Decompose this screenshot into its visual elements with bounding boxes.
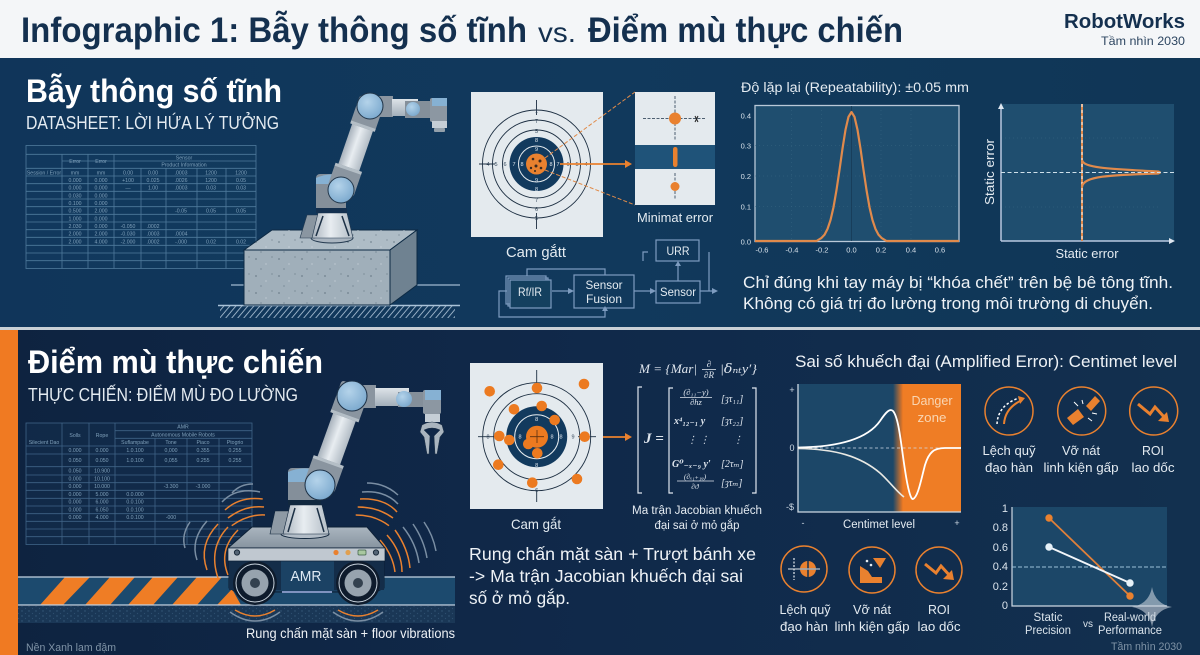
AMR datasheet table: Ptogrio xyxy=(227,440,243,446)
target: repeatability shots: 5 xyxy=(575,162,579,168)
icon: sparkle watermark xyxy=(1132,587,1172,627)
flow labels: Sensor xyxy=(586,278,622,292)
target: scattered shots: 8 xyxy=(518,435,522,441)
y axis ticks: 0.2 xyxy=(993,581,1008,593)
label: trajectory deviation xyxy=(982,443,1036,475)
AMR datasheet table: 6.050 xyxy=(96,508,109,514)
AMR datasheet table: 0.000 xyxy=(69,484,82,490)
AMR datasheet table: 4.000 xyxy=(96,515,109,521)
target: repeatability shots: 8 xyxy=(535,187,538,193)
brand name: RobotWorks xyxy=(1064,11,1185,33)
x axis ticks: -0.2 xyxy=(816,246,828,254)
chart: repeatability gaussian xyxy=(741,106,959,254)
datasheet table xyxy=(26,146,256,268)
icon: ROI falling xyxy=(916,547,962,593)
robot arm on pedestal xyxy=(300,93,447,243)
y axis ticks: 0 xyxy=(1002,600,1008,612)
target: repeatability shots: 8 xyxy=(549,162,553,168)
datasheet table: 4.000 xyxy=(95,240,108,246)
AMR datasheet table: 0.000 xyxy=(69,515,82,521)
AMR datasheet table: 0,000 xyxy=(165,448,178,454)
AMR datasheet table: Silecient Dao xyxy=(29,440,59,446)
danger zone label xyxy=(912,393,953,425)
x axis labels: Real-world xyxy=(1104,612,1156,624)
datasheet table: -.000 xyxy=(175,240,187,246)
danger zone label: zone xyxy=(918,410,946,425)
AMR datasheet table: Tone xyxy=(165,440,177,446)
matrix J xyxy=(638,387,756,493)
datasheet table: 0.02 xyxy=(206,240,216,246)
panel: static spec trap xyxy=(0,58,1200,327)
heading: static trap: Bẫy thông số tĩnh xyxy=(26,73,282,109)
caption: static condition xyxy=(743,273,1173,313)
panel: real-world blind spot xyxy=(0,330,1200,655)
AMR datasheet table: 0.000 xyxy=(69,476,82,482)
target: repeatability shots: 5 xyxy=(535,129,538,135)
flow labels: Rf/IR xyxy=(518,285,542,299)
datasheet table: 0.000 xyxy=(69,186,82,192)
datasheet table: 2.000 xyxy=(69,240,82,246)
target: scattered shots: 8 xyxy=(535,463,538,469)
datasheet table: .0002 xyxy=(147,240,160,246)
datasheet table: 1.000 xyxy=(69,216,82,222)
datasheet table: 0.025 xyxy=(147,178,160,184)
flow labels: Sensor xyxy=(660,285,696,299)
target: repeatability shots: 6 xyxy=(535,207,538,213)
caption: Jacobian: đại sai ở mỏ gắp xyxy=(654,519,740,532)
AMR datasheet table: 0.255 xyxy=(229,448,242,454)
hazard floor band xyxy=(18,577,455,623)
Jacobian equations xyxy=(638,359,758,493)
matrix J: (∂₁₁−y) xyxy=(683,387,709,397)
x axis title: Centimet level xyxy=(843,519,915,531)
x axis ticks: -0.4 xyxy=(786,246,798,254)
matrix J: [2τₘ] xyxy=(721,459,744,470)
AMR datasheet table: Rope xyxy=(96,433,108,439)
subheading: datasheet: DATASHEET: LỜI HỨA LÝ TƯỞNG xyxy=(26,112,279,133)
flow labels: Fusion xyxy=(586,292,622,306)
y axis ticks xyxy=(993,503,1008,612)
AMR datasheet table: 0.0.100 xyxy=(126,515,144,521)
axis labels: - xyxy=(802,518,804,528)
AMR datasheet table: AMR xyxy=(177,424,189,430)
equation M: |ẟₙₜy′} xyxy=(720,361,758,376)
matrix J: ⋮ ⋮ xyxy=(687,435,710,446)
flow labels xyxy=(518,244,696,306)
robot arm on AMR xyxy=(270,380,444,538)
datasheet table: -0.050 xyxy=(121,224,135,230)
label: crushed part xyxy=(834,602,910,634)
y axis ticks: 0.0 xyxy=(741,238,751,246)
target: scattered shots: 8 xyxy=(486,435,490,441)
caption: Jacobian: Ma trận Jacobian khuếch xyxy=(632,505,762,517)
label: target offset: đạo hàn xyxy=(780,619,828,634)
caption: static condition: Không có giá trị đo lường trong môi trường di chuyển. xyxy=(743,294,1153,313)
y axis ticks: 0.8 xyxy=(993,522,1008,534)
AMR datasheet table: 0.050 xyxy=(69,468,82,474)
y axis ticks: 0.2 xyxy=(741,172,751,181)
AMR datasheet table: 0.000 xyxy=(69,492,82,498)
AMR datasheet table: 1.0.100 xyxy=(126,448,144,454)
flow labels: URR xyxy=(666,244,690,258)
equation M: ∂R xyxy=(704,370,714,380)
AMR datasheet table: Autonomous Mobile Robots xyxy=(151,432,215,438)
target: repeatability shots: 6 xyxy=(566,162,570,168)
datasheet table: 0.000 xyxy=(95,224,108,230)
AMR datasheet table: -3.300 xyxy=(164,484,178,490)
x axis ticks: 0.4 xyxy=(906,246,916,254)
label: crushed part: Vỡ nát xyxy=(853,602,891,617)
icon: ROI decline xyxy=(1130,387,1178,435)
label: component breakage xyxy=(1044,443,1118,475)
label: trajectory deviation: đạo hàn xyxy=(985,460,1033,475)
label: component breakage: Vỡ nát xyxy=(1062,443,1100,458)
AMR datasheet table: 0.000 xyxy=(69,508,82,514)
y axis ticks: 0.6 xyxy=(993,542,1008,554)
AMR datasheet table: Piaco xyxy=(197,440,210,446)
chart: static vs real-world xyxy=(993,503,1167,637)
subheading: measurement blind spot: THỰC CHIẾN: ĐIỂM MÙ ĐO LƯỜNG xyxy=(28,384,298,405)
orange accent strip xyxy=(0,330,18,655)
axis labels: 0 xyxy=(789,443,795,453)
AMR datasheet table: 0.000 xyxy=(96,448,109,454)
caption: minimal error: Minimat error xyxy=(637,210,714,225)
AMR datasheet table: 6.000 xyxy=(96,500,109,506)
datasheet table: Error xyxy=(69,159,81,165)
datasheet table: .0002 xyxy=(147,224,160,230)
AMR datasheet table: 0.0.100 xyxy=(126,500,144,506)
AMR datasheet table: -000 xyxy=(166,515,176,521)
x axis ticks xyxy=(756,246,945,254)
AMR datasheet table: 10.000 xyxy=(94,484,110,490)
section divider xyxy=(0,327,1200,330)
matrix J: J = xyxy=(643,431,664,447)
vibration waves xyxy=(184,483,436,621)
datasheet table: 1200 xyxy=(205,170,217,176)
datasheet table: 0.05 xyxy=(236,178,246,184)
datasheet table: .0003 xyxy=(175,186,188,192)
caption: vibration causes xyxy=(469,544,756,608)
caption: static condition: Chỉ đúng khi tay máy bị “khóa chết” trên bệ bê tông tĩnh. xyxy=(743,273,1173,292)
AMR mobile robot xyxy=(228,527,385,605)
AMR datasheet table: 1.0.100 xyxy=(126,458,144,464)
matrix J: ⋮ xyxy=(733,435,743,446)
datasheet table: 0.030 xyxy=(69,193,82,199)
matrix J: ∂ϑ xyxy=(691,482,700,491)
icon: crushed part xyxy=(849,547,895,593)
label: trajectory deviation: Lệch quỹ xyxy=(982,443,1036,458)
AMR datasheet table: 0.050 xyxy=(96,458,109,464)
target: repeatability shots: 1 xyxy=(535,109,538,115)
AMR datasheet table: 0,055 xyxy=(165,458,178,464)
target: repeatability shots: 4 xyxy=(584,162,588,168)
AMR datasheet table: 0.255 xyxy=(197,458,210,464)
x axis labels: vs xyxy=(1083,619,1093,630)
target: repeatability shots: 7 xyxy=(535,198,538,204)
datasheet table: Sensor xyxy=(176,156,192,162)
chart: static error xyxy=(983,103,1175,261)
y axis ticks: 0.4 xyxy=(741,112,751,120)
datasheet table: 0.000 xyxy=(69,178,82,184)
datasheet table: -0.030 xyxy=(121,232,135,238)
target: repeatability shots: 6 xyxy=(503,162,507,168)
x axis ticks: 0.2 xyxy=(876,246,886,254)
AMR datasheet table: 0.050 xyxy=(69,458,82,464)
danger zone label: Danger xyxy=(912,393,953,408)
AMR datasheet table: 0.000 xyxy=(69,500,82,506)
AMR datasheet table: 0.0.000 xyxy=(126,492,144,498)
x axis labels: Precision xyxy=(1025,625,1071,637)
datasheet table: 0.000 xyxy=(95,216,108,222)
caption: floor vibrations: Rung chấn mặt sàn + floor vibrations xyxy=(246,625,455,641)
caption: target: Cam gắt xyxy=(511,516,561,532)
datasheet table: 0.000 xyxy=(95,186,108,192)
label: crushed part: linh kiện gấp xyxy=(834,619,910,634)
AMR label: AMR xyxy=(290,568,322,585)
x axis labels: Performance xyxy=(1098,625,1162,637)
label: ROI falling: ROI xyxy=(928,602,950,617)
target: repeatability shots: 5 xyxy=(535,216,538,222)
datasheet table: 0.02 xyxy=(236,240,246,246)
concrete block and floor xyxy=(218,230,460,318)
title separator vs: vs. xyxy=(538,17,576,48)
axis labels: -$ xyxy=(786,502,794,512)
magnified callout xyxy=(545,92,715,225)
AMR datasheet table: 0.355 xyxy=(197,448,210,454)
target: repeatability shots: 5 xyxy=(494,162,498,168)
y axis ticks: 0.1 xyxy=(741,202,751,212)
x axis labels: Static xyxy=(1034,612,1063,624)
datasheet table: 0.000 xyxy=(95,193,108,199)
datasheet table: 0.000 xyxy=(95,201,108,207)
axis labels: + xyxy=(954,518,960,528)
caption: Jacobian xyxy=(632,505,762,532)
matrix J: [ȝτ₁₁] xyxy=(721,394,743,405)
matrix J: ∂hz xyxy=(690,397,703,407)
heading: amplified error: Sai số khuếch đại (Amplified Error): Centimet level xyxy=(795,352,1177,371)
AMR datasheet table: Suflampabe xyxy=(121,440,149,446)
label: ROI falling: lao dốc xyxy=(918,619,961,634)
label: component breakage: linh kiện gấp xyxy=(1044,460,1118,475)
target: scattered shots: 8 xyxy=(535,417,538,423)
target: repeatability shots: 8 xyxy=(520,162,524,168)
datasheet table: mm xyxy=(71,170,79,176)
datasheet table: .0003 xyxy=(175,170,188,176)
target: repeatability shots: 8 xyxy=(535,138,538,144)
caption: vibration causes: Rung chấn mặt sàn + Trượt bánh xe xyxy=(469,544,756,564)
y axis ticks: 0.4 xyxy=(993,561,1008,573)
target: repeatability shots: 9 xyxy=(535,178,538,184)
left wheel xyxy=(233,561,277,605)
datasheet table: 2.030 xyxy=(69,224,82,230)
AMR datasheet table: -3.000 xyxy=(196,484,210,490)
AMR datasheet table: 0.0.100 xyxy=(126,508,144,514)
datasheet table: 2.000 xyxy=(95,209,108,215)
datasheet table: .0004 xyxy=(175,232,188,238)
datasheet table: Error xyxy=(95,159,107,165)
target: scattered shots: 9 xyxy=(571,435,575,441)
target: repeatability shots: 7 xyxy=(556,162,560,168)
equation M: ∂ xyxy=(707,359,711,369)
x axis title: Static error xyxy=(1056,247,1118,261)
label: ROI falling xyxy=(918,602,961,634)
y axis ticks: 0.3 xyxy=(741,142,751,150)
datasheet table: .0026 xyxy=(175,178,188,184)
caption: target: Cam gắtt xyxy=(506,244,567,261)
footnote left: Nền Xanh lam đậm xyxy=(26,642,116,654)
y axis ticks: 1 xyxy=(1002,503,1008,515)
target: scattered shots: 8 xyxy=(550,435,554,441)
heading: repeatability: Độ lặp lại (Repeatability): ±0.05 mm xyxy=(741,80,969,95)
datasheet table: 0.000 xyxy=(95,178,108,184)
label: ROI decline: ROI xyxy=(1142,443,1164,458)
icon: target offset xyxy=(781,546,827,592)
x axis ticks: 0.0 xyxy=(846,246,857,254)
label: ROI decline: lao dốc xyxy=(1132,460,1175,475)
target: scattered shots: 6 xyxy=(535,488,538,494)
caption: vibration causes: -> Ma trận Jacobian khuếch đại sai xyxy=(469,566,743,586)
datasheet table: 0.00 xyxy=(123,170,133,176)
datasheet table: .0003 xyxy=(147,232,160,238)
chart: amplified error with danger zone xyxy=(786,384,961,531)
matrix J: G⁰₋ₓ₋₉ y′ xyxy=(672,459,711,470)
matrix J: x⁴₁₂₋₁ y xyxy=(673,416,706,427)
target: repeatability shots: 4 xyxy=(486,162,490,168)
title second part: Điểm mù thực chiến xyxy=(588,11,903,50)
datasheet table: 1200 xyxy=(205,178,217,184)
arrow to matrix xyxy=(603,433,632,441)
AMR datasheet table xyxy=(26,423,252,544)
datasheet table: 2.000 xyxy=(69,232,82,238)
AMR datasheet table: 0.255 xyxy=(229,458,242,464)
datasheet table: 0.03 xyxy=(236,186,246,192)
label: target offset: Lệch quỹ xyxy=(780,602,831,617)
footnote right: Tầm nhìn 2030 xyxy=(1111,641,1182,653)
right wheel xyxy=(336,561,380,605)
datasheet table: -0.05 xyxy=(175,209,187,215)
datasheet table: 0.05 xyxy=(206,209,216,215)
target: repeatability shots: 7 xyxy=(535,119,538,125)
caption: vibration causes: số ở mỏ gắp. xyxy=(469,587,570,608)
equation M xyxy=(638,359,758,380)
AMR datasheet table: Solls xyxy=(69,433,81,439)
x axis labels xyxy=(1025,612,1162,637)
icon: component breakage xyxy=(1058,387,1106,435)
datasheet table: 0.03 xyxy=(206,186,216,192)
datasheet table: Session / Error xyxy=(27,170,61,176)
matrix J: [ȝτ₂₂] xyxy=(721,416,743,427)
header bar xyxy=(0,0,1200,58)
datasheet table: 0.500 xyxy=(69,209,82,215)
y axis ticks xyxy=(741,112,751,246)
datasheet table: mm xyxy=(97,170,105,176)
sensor fusion flow diagram xyxy=(499,240,718,317)
datasheet table: +100 xyxy=(122,178,134,184)
target: scattered shots: 8 xyxy=(559,435,563,441)
x axis ticks: -0.6 xyxy=(756,246,768,254)
matrix J: [ȝτₘ] xyxy=(721,478,743,489)
datasheet table: 2.000 xyxy=(95,232,108,238)
datasheet table: 1.00 xyxy=(148,186,158,192)
datasheet table: — xyxy=(125,186,131,192)
heading: blind spot: Điểm mù thực chiến xyxy=(28,344,323,380)
datasheet table: -2.000 xyxy=(121,240,135,246)
label: target offset xyxy=(780,602,831,634)
x axis ticks: 0.6 xyxy=(935,246,945,254)
brand tagline: Tầm nhìn 2030 xyxy=(1101,34,1185,48)
target: repeatability shots: 9 xyxy=(535,147,538,153)
target: repeatability shots: 7 xyxy=(512,162,516,168)
equation M: M = {Mar| xyxy=(638,361,697,376)
y axis title: Static error xyxy=(983,139,997,205)
datasheet table: Product Information xyxy=(161,162,207,168)
title: Infographic 1: Bẫy thông số tĩnh xyxy=(21,10,527,50)
datasheet table: 1200 xyxy=(235,170,247,176)
label: ROI decline xyxy=(1132,443,1175,475)
AMR datasheet table: 10.100 xyxy=(94,476,110,482)
axis labels: + xyxy=(789,385,795,395)
datasheet table: 0.100 xyxy=(69,201,82,207)
AMR datasheet table: 10.900 xyxy=(94,468,110,474)
datasheet table: 0.05 xyxy=(236,209,246,215)
target: repeatability shots xyxy=(471,92,603,237)
icon: trajectory deviation xyxy=(985,387,1033,435)
axis labels xyxy=(786,385,960,528)
AMR datasheet table: 5.000 xyxy=(96,492,109,498)
datasheet table: 0.00 xyxy=(148,170,158,176)
target: scattered shots xyxy=(470,363,603,509)
AMR datasheet table: 0.000 xyxy=(69,448,82,454)
matrix J: (∂ₓ₁₊₁ᵩ) xyxy=(684,472,707,481)
